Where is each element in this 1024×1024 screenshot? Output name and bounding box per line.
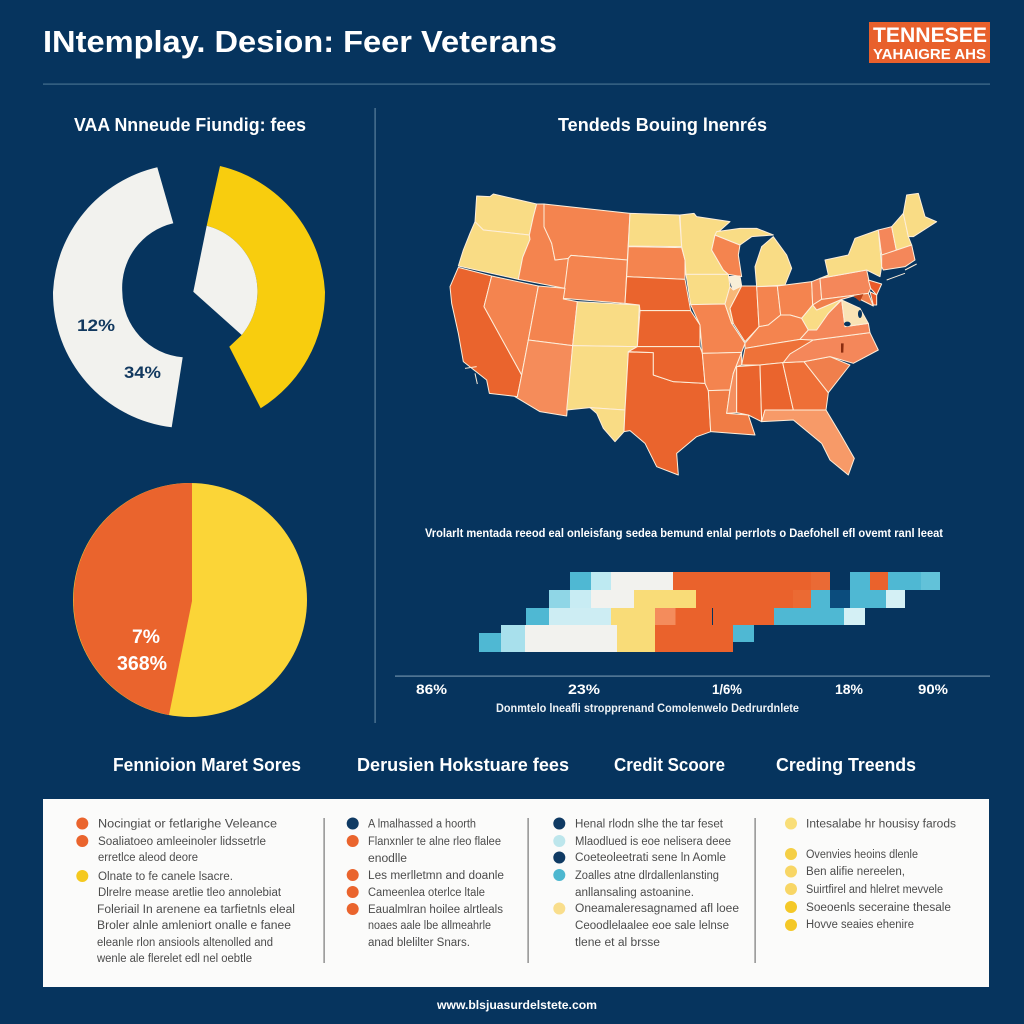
donut chart: 34%: [124, 363, 161, 382]
list: column 2: enodlle: [368, 853, 407, 865]
section headings: Credit Scoore: [614, 755, 725, 775]
US map: [450, 193, 937, 475]
badge: Tennessee logo: TENNESEE: [873, 24, 987, 47]
axis labels: 18%: [835, 681, 864, 697]
list: column 2: noaes aale lbe allmeahrle: [368, 920, 491, 932]
list: column 2: [347, 818, 504, 949]
list: column 1: Soaliatoeo amleeinoler lidssetrle: [98, 836, 266, 848]
axis labels: 1/6%: [712, 681, 743, 697]
list: column 1: wenle ale flerelet edl nel oebtle: [96, 953, 252, 965]
list: column 4: Intesalabe hr housisy farods: [806, 818, 956, 830]
caption: heat chart: Vrolarlt mentada reeod eal onleisfang sedea bemund enlal perrlots o Daefohell efl ovemt ranl leeat: [425, 528, 943, 540]
list: column 3: [553, 818, 739, 949]
heading: map: Tendeds Bouing lnenrés: [558, 115, 767, 135]
list: column 4: Suirtfirel and hlelret mevvele: [806, 884, 943, 896]
list: column 1: Broler alnle amleniort onalle e fanee: [97, 920, 291, 932]
footer url: www.blsjuasurdelstete.com: [436, 998, 597, 1012]
list: column 2: anad blelilter Snars.: [368, 937, 470, 949]
axis labels: 90%: [918, 681, 949, 697]
list: column 4: Soeoenls seceraine thesale: [806, 902, 951, 914]
panel: lists: [43, 799, 989, 987]
list: column 4: Ben alifie nereelen,: [806, 866, 905, 878]
badge: Tennessee logo: YAHAIGRE AHS: [873, 46, 986, 63]
list: column 1: Foleriail In arenene ea tarfietnls eleal: [97, 904, 295, 916]
list: column 1: [76, 818, 295, 965]
caption: axis: Donmtelo lneafli stropprenand Comolenwelo Dedrurdnlete: [496, 703, 799, 715]
donut chart: 12%: [77, 316, 115, 335]
axis labels: 86%: [416, 681, 448, 697]
section headings: Fennioion Maret Sores: [113, 755, 301, 775]
list: column 1: Olnate to fe canele lsacre.: [98, 871, 233, 883]
pie chart: 368%: [117, 653, 167, 675]
list: column 1: erretlce aleod deore: [98, 852, 198, 864]
list: column 1: eleanle rlon ansiools altenolled and: [97, 937, 273, 949]
list: column 4: Ovenvies heoins dlenle: [806, 849, 918, 861]
heat strip chart: [479, 572, 940, 652]
list: column 2: Les merlletmn and doanle: [368, 870, 504, 882]
list: column 2: A lmalhassed a hoorth: [368, 818, 476, 830]
list: column 3: Ceoodlelaalee eoe sale lelnse: [575, 920, 729, 932]
section headings: Derusien Hokstuare fees: [357, 755, 569, 775]
list: column 3: Zoalles atne dlrdallenlansting: [575, 870, 719, 882]
list: column 3: Henal rlodn slhe the tar feset: [575, 818, 724, 830]
list: column 1: Nocingiat or fetlarighe Veleance: [98, 818, 277, 830]
heading: funding fees: VAA Nnneude Fiundig: fees: [74, 115, 306, 135]
list: column 3: anllansaling astoanine.: [575, 887, 694, 899]
pie chart: [73, 483, 307, 717]
axis labels: 23%: [568, 681, 601, 697]
axis labels: [416, 681, 949, 697]
list: column 1: Dlrelre mease aretlie tleo annolebiat: [98, 887, 282, 899]
list: column 3: Mlaodlued is eoe nelisera deee: [575, 836, 731, 848]
donut chart: [53, 166, 325, 427]
list: column 4: [785, 818, 956, 931]
pie chart: 7%: [132, 627, 160, 648]
list: column 2: Cameenlea oterlce ltale: [368, 887, 485, 899]
list: column 3: Oneamaleresagnamed afl loee: [575, 903, 739, 915]
section headings: [113, 755, 916, 775]
list: column 3: tlene et al brsse: [575, 937, 660, 949]
list: column 3: Coeteoleetrati sene ln Aomle: [575, 852, 726, 864]
list: column 4: Hovve seaies ehenire: [806, 919, 914, 931]
section headings: Creding Treends: [776, 755, 916, 775]
title: INtemplay. Desion: Feer Veterans: [43, 24, 557, 59]
list: column 2: Flanxnler te alne rleo flalee: [368, 836, 501, 848]
list: column 2: Eaualmlran hoilee alrtleals: [368, 904, 503, 916]
badge: Tennessee logo: [869, 22, 990, 63]
